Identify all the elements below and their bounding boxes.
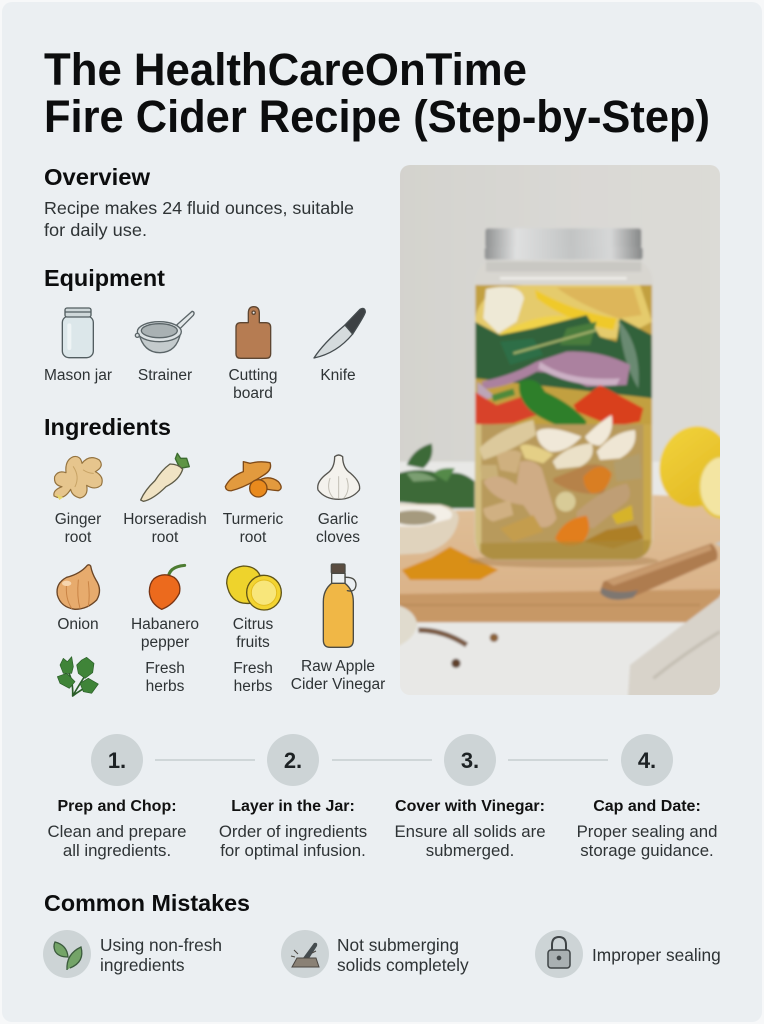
equipment icons <box>62 307 365 358</box>
spice bowl <box>400 502 460 556</box>
step 1: 1. <box>108 748 126 773</box>
step 2: for optimal infusion. <box>220 841 366 860</box>
lemons <box>658 424 720 508</box>
ingredient labels: pepper <box>141 634 189 651</box>
jar lid <box>485 228 641 248</box>
ingredient labels: Citrus <box>233 616 273 633</box>
ingredient labels: Onion <box>57 616 99 633</box>
icon: leaves <box>54 942 82 970</box>
ingredient labels: herbs <box>234 678 273 695</box>
herb layer <box>475 315 653 398</box>
step 3: Cover with Vinegar: <box>395 798 545 815</box>
mistake: not submerging solids: Not submerging <box>337 935 459 955</box>
pepper layer <box>475 392 537 425</box>
mistake: not submerging solids <box>281 930 469 978</box>
icon: turmeric <box>225 462 281 497</box>
equipment labels: Mason jar <box>44 367 112 384</box>
mistake: not submerging solids: solids completely <box>337 955 469 975</box>
step 1: Clean and prepare <box>47 822 187 841</box>
overview section: for daily use. <box>44 220 147 240</box>
icon: parsley <box>57 657 98 696</box>
step 1: Prep and Chop: <box>57 798 177 815</box>
step 2: 2. <box>284 748 302 773</box>
step 3 <box>394 734 546 860</box>
icon: mason jar <box>62 308 93 358</box>
step 4 <box>577 734 717 860</box>
ingredient labels: root <box>152 529 179 546</box>
icon: garlic <box>318 455 360 499</box>
turmeric powder <box>402 547 498 580</box>
lemon layer <box>475 285 652 338</box>
icon: padlock <box>548 937 570 968</box>
mistake: non-fresh ingredients: Using non-fresh <box>100 935 222 955</box>
icon: onion <box>57 565 100 609</box>
vinegar liquid <box>474 284 654 426</box>
icon: citrus <box>227 566 281 610</box>
overview section <box>44 164 354 240</box>
mistake: non-fresh ingredients: ingredients <box>100 955 185 975</box>
ingredient labels: Fresh <box>233 660 273 677</box>
step 4: Cap and Date: <box>593 798 701 815</box>
ingredient icons <box>54 453 360 696</box>
title: Fire Cider Recipe (Step-by-Step) <box>44 91 710 142</box>
ingredient labels: herbs <box>146 678 185 695</box>
icon: knife on board <box>291 943 319 967</box>
equipment labels <box>44 367 356 402</box>
cutting board <box>380 495 740 595</box>
tablecloth and spices <box>628 596 720 695</box>
photo: fire cider jar on cutting board <box>400 165 720 695</box>
ginger and turmeric <box>479 420 536 460</box>
step 3: Ensure all solids are <box>394 822 546 841</box>
ingredient labels <box>55 511 385 695</box>
jar shadow <box>468 556 658 568</box>
common mistakes heading: Common Mistakes <box>44 890 250 916</box>
step 3: 3. <box>461 748 479 773</box>
step 1 <box>47 734 187 860</box>
icon: knife <box>314 308 365 358</box>
ingredient labels: cloves <box>316 529 360 546</box>
mistake: improper sealing: Improper sealing <box>592 945 721 965</box>
icon: ginger <box>54 456 102 500</box>
mistake: improper sealing <box>535 930 721 978</box>
ingredient labels: Turmeric <box>223 511 284 528</box>
icon: strainer <box>135 311 194 353</box>
overview section: Recipe makes 24 fluid ounces, suitable <box>44 198 354 218</box>
step connector lines <box>155 759 608 761</box>
overview section: Overview <box>44 164 150 190</box>
equipment labels: board <box>233 385 273 402</box>
knife handle <box>600 543 718 599</box>
ingredient labels: Cider Vinegar <box>291 676 385 693</box>
jar glass <box>472 482 654 560</box>
ingredients heading: Ingredients <box>44 414 171 440</box>
step 2 <box>219 734 367 860</box>
step 4: 4. <box>638 748 656 773</box>
equipment labels: Cutting <box>228 367 278 384</box>
lower gold layer <box>475 424 653 561</box>
step 4: storage guidance. <box>580 841 714 860</box>
icon: cutting board <box>236 307 271 358</box>
step 3: submerged. <box>426 841 514 860</box>
title <box>44 44 710 142</box>
ingredient labels: Fresh <box>145 660 185 677</box>
step 2: Order of ingredients <box>219 822 367 841</box>
title: The HealthCareOnTime <box>44 44 527 95</box>
step 2: Layer in the Jar: <box>231 798 355 815</box>
garlic <box>537 428 582 452</box>
table surface <box>400 461 682 695</box>
ingredient labels: Garlic <box>318 511 358 528</box>
ingredient labels: root <box>240 529 267 546</box>
ingredient labels: Horseradish <box>123 511 207 528</box>
step 1: all ingredients. <box>63 841 171 860</box>
ingredient labels: root <box>65 529 92 546</box>
icon: horseradish <box>141 453 189 501</box>
equipment labels: Strainer <box>138 367 192 384</box>
step 4: Proper sealing and <box>577 822 717 841</box>
jar neck <box>475 262 653 285</box>
icon: vinegar bottle <box>323 564 356 647</box>
red onion layer <box>482 351 630 389</box>
equipment labels: Knife <box>320 367 356 384</box>
icon: habanero <box>149 565 185 609</box>
jar <box>475 228 653 561</box>
mistake: non-fresh ingredients <box>43 930 222 978</box>
ingredient labels: Raw Apple <box>301 658 375 675</box>
ingredient labels: Ginger <box>55 511 101 528</box>
ingredient labels: Habanero <box>131 616 199 633</box>
wall background <box>400 165 720 462</box>
herbs behind jar <box>393 443 475 508</box>
equipment heading: Equipment <box>44 265 165 291</box>
ingredient labels: fruits <box>236 634 270 651</box>
